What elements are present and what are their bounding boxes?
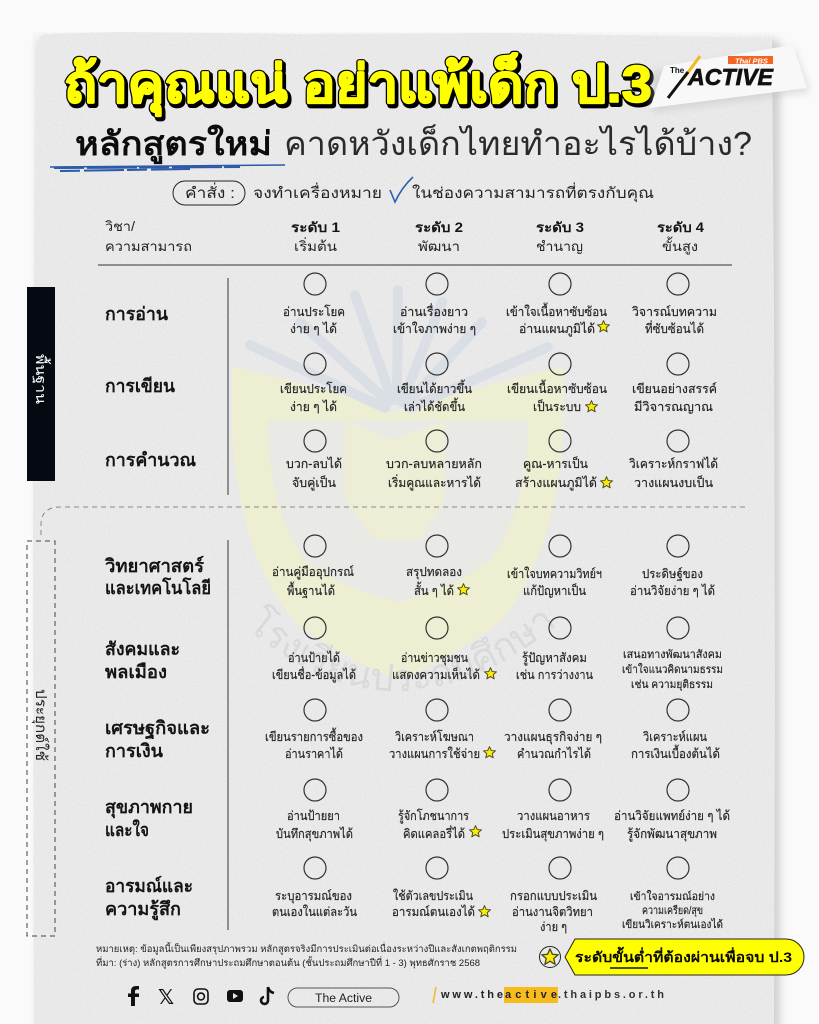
row: emotions: ระบุอารมณ์ของ <box>275 889 352 904</box>
row: health: ประเมินสุขภาพง่าย ๆ <box>502 827 604 842</box>
row: math: คูณ-หารเป็น <box>523 456 588 472</box>
icon: tiktok <box>261 987 274 1004</box>
row: economics: การเงิน <box>105 741 164 761</box>
table header: ขั้นสูง <box>662 236 698 255</box>
row: society: อ่านข่าวชุมชน <box>401 651 468 666</box>
row: science <box>104 535 715 598</box>
row: math: เริ่มคูณและหารได้ <box>388 474 481 491</box>
social icons <box>128 986 274 1009</box>
footnote: หมายเหตุ: ข้อมูลนี้เป็นเพียงสรุปภาพรวม หลักสูตรจริงมีการประเมินต่อเนื่องระหว่างปีและสังเกตพฤติกรรม <box>96 942 517 955</box>
row: society: เช่น ความยุติธรรม <box>631 679 713 691</box>
row: math: จับคู่เป็น <box>292 475 336 491</box>
row: society: เสนอทางพัฒนาสังคม <box>623 649 722 661</box>
row: science: พื้นฐานได้ <box>287 581 335 598</box>
row: math: การคำนวณ <box>105 450 196 470</box>
row: writing: เขียนเนื้อหาซับซ้อน <box>507 379 607 396</box>
row: economics: วางแผนธุรกิจง่าย ๆ <box>504 730 602 745</box>
row: emotions: กรอกแบบประเมิน <box>510 889 597 903</box>
row: writing: เขียนประโยค <box>280 381 347 396</box>
icon: check mark <box>390 177 413 202</box>
row: science: สั้น ๆ ได้ <box>414 581 454 598</box>
row: math <box>105 430 718 491</box>
side tab: foundation: พื้นฐาน <box>32 354 51 404</box>
row: reading: วิจารณ์บทความ <box>632 305 717 319</box>
row: society: เช่น การว่างงาน <box>516 668 593 682</box>
row: emotions: เข้าใจอารมณ์อย่าง <box>630 890 715 903</box>
table header: พัฒนา <box>418 239 460 254</box>
row: math: บวก-ลบได้ <box>286 457 342 471</box>
row: reading: เข้าใจเนื้อหาซับซ้อน <box>506 302 607 319</box>
row: math: วางแผนงบเป็น <box>634 475 713 490</box>
row: reading: ที่ซับซ้อนได้ <box>645 320 704 336</box>
row: society: แสดงความเห็นได้ <box>392 667 480 682</box>
row: emotions: เขียนวิเคราะห์ตนเองได้ <box>622 918 723 931</box>
row: economics: เขียนรายการซื้อของ <box>265 727 363 744</box>
row: reading: เข้าใจภาพง่าย ๆ <box>393 322 476 336</box>
row: society: อ่านป้ายได้ <box>288 651 340 665</box>
instruction line: ในช่องความสามารถที่ตรงกับคุณ <box>412 182 654 203</box>
scribble underline <box>50 165 285 171</box>
row: society <box>105 617 723 691</box>
table header: วิชา/ <box>105 219 135 234</box>
row: science: สรุปทดลอง <box>406 565 462 580</box>
row: emotions: ความเครียด/สุข <box>642 904 703 917</box>
website url: www.the <box>440 989 503 1001</box>
instruction label pill: คำสั่ง : <box>185 182 235 202</box>
logo: The Active sticker <box>650 45 810 112</box>
row: society: เขียนชื่อ-ข้อมูลได้ <box>272 666 356 683</box>
social handle pill: The Active <box>315 993 372 1005</box>
footnote: ที่มา: (ร่าง) หลักสูตรการศึกษาประถมศึกษาตอนต้น (ชั้นประถมศึกษาปีที่ 1 - 3) พุทธศักราช 2568 <box>96 956 480 969</box>
table header: ระดับ 1 <box>291 220 341 235</box>
row: economics: วางแผนการใช้จ่าย <box>389 747 480 761</box>
row: society: สังคมและ <box>105 639 180 659</box>
row: emotions: อารมณ์และ <box>105 875 193 896</box>
row: health: รู้จักโภชนาการ <box>398 808 469 824</box>
watermark: school emblem <box>232 285 564 691</box>
row: emotions: ตนเองในแต่ละวัน <box>272 905 357 919</box>
row: science: วิทยาศาสตร์ <box>104 555 204 576</box>
row: economics: วิเคราะห์โฆษณา <box>395 729 474 744</box>
title: ถ้าคุณแน่ อย่าแพ้เด็ก ป.3 <box>66 56 654 120</box>
row: writing <box>105 353 717 414</box>
row: writing: เล่าได้ชัดขึ้น <box>404 397 465 414</box>
row: science: อ่านคู่มืออุปกรณ์ <box>272 565 354 580</box>
row: health: และใจ <box>105 819 149 840</box>
website url: active <box>505 989 557 1001</box>
table header: ระดับ 3 <box>536 220 585 235</box>
row: writing: เขียนอย่างสรรค์ <box>632 382 717 396</box>
row: health: วางแผนอาหาร <box>517 809 590 823</box>
row: health: รู้จักพัฒนาสุขภาพ <box>627 827 717 842</box>
row: economics <box>105 699 720 761</box>
row: economics: อ่านราคาได้ <box>285 747 343 761</box>
row: society: เข้าใจแนวคิดนามธรรม <box>622 663 723 676</box>
table header: ความสามารถ <box>105 239 192 254</box>
row: health <box>105 779 730 842</box>
row: science: อ่านวิจัยง่าย ๆ ได้ <box>630 584 715 598</box>
row: health: อ่านป้ายยา <box>287 809 340 823</box>
row: economics: การเงินเบื้องต้นได้ <box>631 744 720 761</box>
row: economics: เศรษฐกิจและ <box>105 718 210 740</box>
subtitle: หลักสูตรใหม่ <box>75 124 272 165</box>
row: science: แก้ปัญหาเป็น <box>523 583 586 598</box>
icon: star badge <box>540 946 560 968</box>
row: reading: อ่านแผนภูมิได้ <box>519 322 595 337</box>
subtitle: คาดหวังเด็กไทยทำอะไรได้บ้าง? <box>284 124 752 162</box>
row: science: ประดิษฐ์ของ <box>642 567 703 581</box>
row: emotions: อ่านงานจิตวิทยา <box>512 905 593 919</box>
table header: ระดับ 4 <box>657 220 705 235</box>
row: health: บันทึกสุขภาพได้ <box>276 827 353 842</box>
side tab: applied: ประยุกต์ใช้ <box>31 689 50 761</box>
row: reading: การอ่าน <box>105 304 169 324</box>
row: reading <box>105 273 717 337</box>
website url: .thaipbs.or.th <box>558 989 664 1001</box>
logo: The Active sticker: Thai PBS <box>735 56 768 66</box>
row: writing: เขียนได้ยาวขึ้น <box>397 379 472 396</box>
row: writing: เป็นระบบ <box>533 399 581 414</box>
social handle pill <box>288 988 399 1007</box>
callout: minimum level <box>540 939 804 975</box>
row: reading: อ่านเรื่องยาว <box>400 303 468 319</box>
row: emotions: ง่าย ๆ <box>540 920 567 934</box>
row: economics: คำนวณกำไรได้ <box>517 747 591 761</box>
icon: instagram <box>194 989 208 1004</box>
callout: minimum level: ระดับขั้นต่ำที่ต้องผ่านเพื่อจบ ป.3 <box>575 946 792 965</box>
icon: X: 𝕏 <box>158 987 174 1009</box>
website url <box>433 987 664 1003</box>
table header <box>105 219 705 255</box>
row: reading: ง่าย ๆ ได้ <box>290 322 337 336</box>
side tab: foundation <box>27 287 55 481</box>
footnote <box>96 942 517 969</box>
row: science: และเทคโนโลยี <box>105 577 211 598</box>
instruction label pill <box>173 181 245 205</box>
row: society: พลเมือง <box>105 662 167 682</box>
row: health: คิดแคลอรี่ได้ <box>403 825 465 841</box>
title: ถ้าคุณแน่ อย่าแพ้เด็ก ป.3 <box>64 53 652 117</box>
row: science: เข้าใจบทความวิทย์ฯ <box>507 567 602 581</box>
row: math: สร้างแผนภูมิได้ <box>515 476 597 491</box>
watermark: school name: โรงเรียนประถมศึกษา <box>255 604 554 691</box>
table header: ชำนาญ <box>536 239 583 254</box>
row: emotions: ความรู้สึก <box>105 899 181 921</box>
row: reading: อ่านประโยค <box>283 304 345 319</box>
table header: เริ่มต้น <box>294 237 337 254</box>
row: emotions <box>105 857 723 934</box>
instruction line <box>173 177 654 205</box>
instruction line: จงทำเครื่องหมาย <box>253 182 382 202</box>
subtitle <box>75 124 752 165</box>
title: ถ้าคุณแน่ อย่าแพ้เด็ก ป.3 <box>64 53 652 117</box>
icon: facebook <box>128 986 139 1006</box>
row: writing: การเขียน <box>105 376 176 396</box>
side tab: applied <box>27 541 55 936</box>
row: math: บวก-ลบหลายหลัก <box>386 457 482 471</box>
logo: The Active sticker: The <box>670 66 685 75</box>
row: emotions: ใช้ตัวเลขประเมิน <box>393 889 473 903</box>
table header: ระดับ 2 <box>415 220 463 235</box>
row: health: อ่านวิจัยแพทย์ง่าย ๆ ได้ <box>614 809 730 823</box>
logo: The Active sticker: ACTIVE <box>687 64 774 90</box>
row: writing: ง่าย ๆ ได้ <box>290 400 337 414</box>
row: society: รู้ปัญหาสังคม <box>522 651 587 666</box>
row: writing: มีวิจารณญาณ <box>634 400 713 414</box>
icon: youtube <box>227 990 243 1002</box>
row: health: สุขภาพกาย <box>105 797 193 819</box>
row: emotions: อารมณ์ตนเองได้ <box>392 905 475 919</box>
row: math: วิเคราะห์กราฟได้ <box>629 457 718 471</box>
row: economics: วิเคราะห์แผน <box>643 730 707 744</box>
